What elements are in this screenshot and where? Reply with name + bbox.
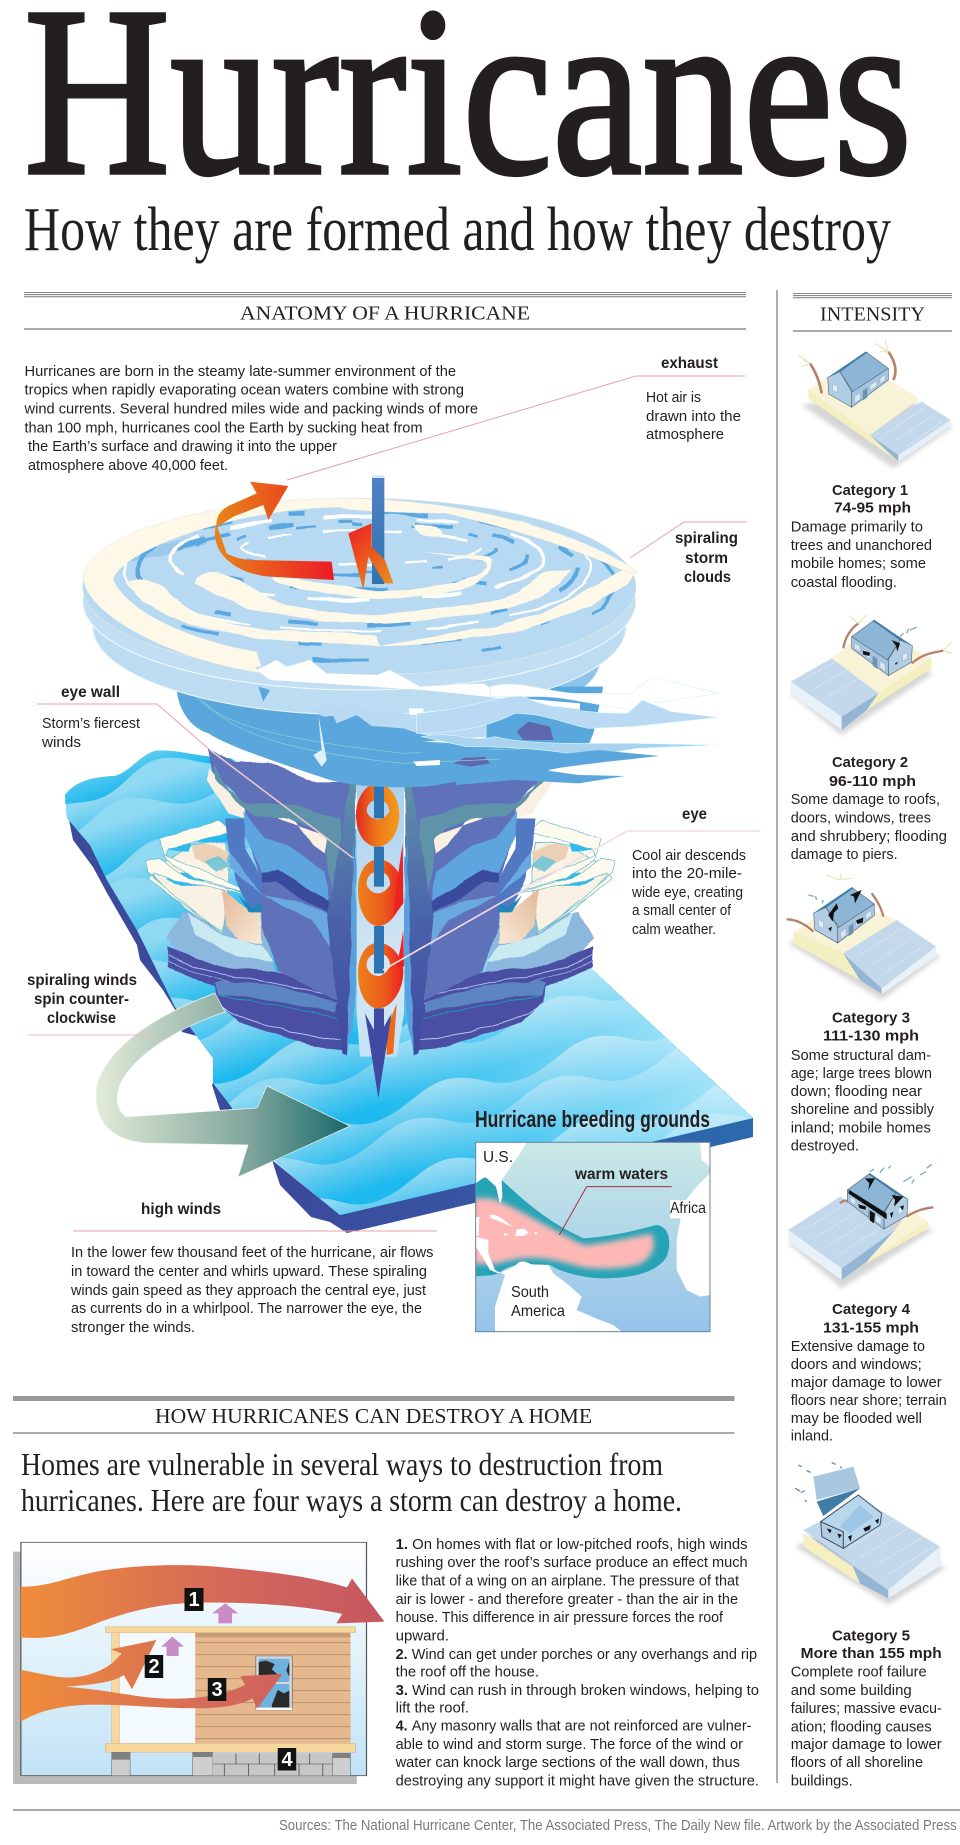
text: four ways a storm destroys a home: 1. On homes with flat or low-pitched roofs, high winds [396, 1536, 748, 1553]
text: category 3: 111-130 mph [823, 1028, 919, 1045]
text: four ways a storm destroys a home: the roof off the house. [396, 1664, 539, 1681]
text: category 3: down; flooding near [791, 1083, 922, 1100]
ocean surface [65, 750, 753, 1233]
hurricane lower storm column [147, 750, 614, 1098]
map: breeding grounds: America [511, 1303, 565, 1320]
text: category 5: More than 155 mph [801, 1645, 942, 1662]
text: category 3: inland; mobile homes [791, 1120, 931, 1137]
text: category 5: failures; massive evacu- [791, 1700, 942, 1717]
number tags: 1 [188, 1589, 200, 1611]
text: category 5: ation; flooding causes [791, 1719, 932, 1736]
text: category 3 [791, 1010, 934, 1155]
callout: spiraling storm clouds: clouds [684, 569, 731, 586]
heading: anatomy of a hurricane [24, 292, 746, 329]
intro text block: Hurricanes are born in the steamy late-summer environment of the [24, 363, 456, 380]
callout: exhaust: drawn into the [646, 408, 741, 425]
callout: eye wall: Storm’s fiercest [42, 715, 141, 732]
text: category 5: Category 5 [832, 1628, 910, 1645]
callout: spiraling storm clouds [630, 522, 747, 586]
map: breeding grounds [473, 1142, 710, 1332]
hurricane upper cloud disc [83, 475, 638, 787]
text: category 2: Category 2 [832, 754, 908, 771]
house structure [106, 1627, 355, 1776]
heading: intensity [793, 294, 952, 331]
callout: eye: calm weather. [632, 921, 716, 938]
text: category 4: doors and windows; [791, 1356, 922, 1373]
text: four ways a storm destroys a home: able to wind and storm surge. The force of the wind or [396, 1736, 743, 1753]
icon: category 1 house [798, 340, 953, 468]
callout: exhaust [287, 355, 745, 480]
map: breeding grounds: South [511, 1284, 549, 1301]
text: category 1: Damage primarily to [791, 519, 923, 536]
number tags: 2 [148, 1656, 160, 1678]
callout: spiraling winds: clockwise [47, 1010, 116, 1027]
outer cream rim [83, 498, 638, 673]
intro text block [24, 363, 478, 474]
text: four ways a storm destroys a home: house. This difference in air pressure forces the roof [396, 1609, 724, 1626]
text: four ways a storm destroys a home: like that of a wing on an airplane. The pressure of that [396, 1573, 740, 1590]
text: four ways a storm destroys a home: 4. Any masonry walls that are not reinforced are vulner- [396, 1718, 752, 1735]
diagram: wind damage to a house [13, 1542, 384, 1784]
callout: spiraling winds: spiraling winds [27, 972, 137, 989]
text: category 5: buildings. [791, 1773, 853, 1790]
number tags [145, 1588, 296, 1771]
left half of storm wall and cloud bands [147, 750, 359, 1057]
callout: high winds: in toward the center and whirls upward. These spiraling [71, 1263, 427, 1280]
map: breeding grounds: U.S. [483, 1149, 513, 1166]
callout: high winds: winds gain speed as they approach the central eye, just [70, 1282, 427, 1299]
callout: eye wall: eye wall [61, 684, 120, 701]
text: category 2: doors, windows, trees [791, 810, 931, 827]
text: category 3: Category 3 [832, 1010, 910, 1027]
callout: eye [383, 806, 760, 970]
intro text block: than 100 mph, hurricanes cool the Earth by sucking heat from [24, 419, 422, 436]
map: breeding grounds: warm waters [574, 1166, 668, 1183]
callout: spiraling storm clouds: storm [685, 550, 728, 567]
text: category 4: 131-155 mph [823, 1320, 919, 1337]
cloud streaks trailing right [417, 678, 718, 785]
text: four ways a storm destroys a home: air is lower - and therefore greater - than the air in the [396, 1591, 738, 1608]
callout: exhaust: Hot air is [646, 389, 701, 406]
text: category 3: destroyed. [791, 1138, 859, 1155]
wind arrow 3 [21, 1674, 283, 1722]
callout: high winds: as currents do in a whirlpool. The narrower the eye, the [71, 1300, 422, 1317]
text: category 1: 74-95 mph [834, 500, 911, 517]
text: category 4: may be flooded well [791, 1410, 922, 1427]
number tags: 3 [211, 1679, 223, 1701]
text: category 1 [791, 482, 932, 591]
text: category 4: floors near shore; terrain [791, 1392, 947, 1409]
text: category 5: floors of all shoreline [791, 1754, 923, 1771]
text: category 1: Category 1 [832, 482, 908, 499]
callout: spiraling winds [27, 972, 155, 1035]
text: category 4: Category 4 [832, 1301, 911, 1318]
callout: eye: into the 20-mile- [632, 865, 742, 882]
central blue rod [365, 783, 392, 1098]
text: category 5: Complete roof failure [791, 1664, 927, 1681]
intro: homes are vulnerable: hurricanes. Here are four ways a storm can destroy a home. [21, 1483, 682, 1518]
callout: eye: a small center of [632, 902, 732, 919]
text: four ways a storm destroys a home: 2. Wind can get under porches or any overhangs and rip [396, 1646, 757, 1663]
heading: anatomy of a hurricane: ANATOMY OF A HURRICANE [240, 302, 530, 324]
heading: hurricane breeding grounds: Hurricane breeding grounds [475, 1106, 710, 1132]
text: category 3: shoreline and possibly [791, 1101, 934, 1118]
text: four ways a storm destroys a home: rushing over the roof’s surface produce an effect much [396, 1554, 748, 1571]
intro text block: wind currents. Several hundred miles wide and packing winds of more [24, 400, 478, 418]
exhaust rod and arrows [215, 475, 393, 590]
heading: how hurricanes can destroy a home: HOW HURRICANES CAN DESTROY A HOME [155, 1404, 592, 1428]
text: category 2: and shrubbery; flooding [791, 828, 947, 845]
callout: high winds [70, 1201, 437, 1336]
text: category 5 [791, 1628, 942, 1790]
intro: homes are vulnerable: Homes are vulnerable in several ways to destruction from [21, 1447, 663, 1482]
map: breeding grounds: Africa [670, 1200, 706, 1217]
curved high-wind arrow [96, 993, 350, 1177]
white lower cloud band and drips [255, 660, 580, 766]
callout: eye: Cool air descends [632, 847, 746, 864]
text: category 2: damage to piers. [791, 846, 898, 863]
heading: how hurricanes can destroy a home [13, 1396, 734, 1433]
icon: category 5 house [795, 1463, 945, 1605]
text: category 3: Some structural dam- [791, 1047, 931, 1064]
callout: eye: eye [682, 806, 707, 823]
callout: eye wall [37, 684, 353, 858]
text: four ways a storm destroys a home: upward. [396, 1628, 449, 1645]
text: category 4 [791, 1301, 947, 1445]
wind arrow 2 [21, 1640, 156, 1692]
text: category 5: and some building [791, 1682, 912, 1699]
icon: category 2 house [790, 615, 952, 735]
intro text block: atmosphere above 40,000 feet. [28, 457, 228, 474]
land masses [476, 1142, 710, 1332]
callout: spiraling winds: spin counter- [34, 991, 129, 1008]
text: category 2 [791, 754, 947, 863]
text: category 3: age; large trees blown [791, 1065, 932, 1082]
callout: exhaust: atmosphere [646, 426, 724, 443]
text: category 4: Extensive damage to [791, 1338, 925, 1355]
text: four ways a storm destroys a home: 3. Wind can rush in through broken windows, helping to [396, 1682, 759, 1699]
text: four ways a storm destroys a home [395, 1536, 759, 1790]
callout: eye wall: winds [41, 734, 81, 751]
callout: high winds: high winds [141, 1201, 221, 1218]
text: category 2: Some damage to roofs, [791, 791, 940, 808]
intro text block: the Earth’s surface and drawing it into the upper [28, 438, 337, 455]
lift arrows [161, 1603, 238, 1656]
text: category 4: major damage to lower [791, 1374, 942, 1391]
text: four ways a storm destroys a home: destroying any support it might have given the structure. [396, 1773, 759, 1790]
spiral cloud bands [100, 507, 638, 662]
number tags: 4 [281, 1749, 293, 1771]
intro: homes are vulnerable [21, 1447, 682, 1518]
callout: high winds: In the lower few thousand feet of the hurricane, air flows [71, 1244, 434, 1261]
text: four ways a storm destroys a home: lift the roof. [396, 1700, 469, 1717]
callout: spiraling storm clouds: spiraling [675, 530, 738, 547]
eye of the storm [357, 780, 404, 1057]
text: category 1: mobile homes; some [791, 555, 926, 572]
text: category 1: coastal flooding. [791, 574, 897, 591]
heading: intensity: INTENSITY [820, 304, 925, 326]
callout: high winds: stronger the winds. [71, 1319, 195, 1336]
broken window [256, 1656, 292, 1710]
callout: eye: wide eye, creating [631, 884, 743, 901]
orange spiral ribbons around the central rod [356, 783, 404, 1055]
icon: category 4 house [788, 1164, 933, 1288]
text: four ways a storm destroys a home: water can knock large sections of the wall down, thus [395, 1754, 740, 1771]
intro text block: tropics when rapidly evaporating ocean waters combine with strong [24, 382, 464, 399]
callout: exhaust: exhaust [661, 355, 719, 372]
warm water band [473, 1178, 669, 1278]
right half of storm wall and cloud bands [402, 750, 614, 1057]
text: category 2: 96-110 mph [829, 773, 916, 790]
wind arrow 1 [21, 1565, 384, 1638]
text: category 1: trees and unanchored [791, 537, 932, 554]
text: category 4: inland. [791, 1428, 833, 1445]
text: category 5: major damage to lower [791, 1736, 942, 1753]
icon: category 3 house [787, 873, 940, 1000]
